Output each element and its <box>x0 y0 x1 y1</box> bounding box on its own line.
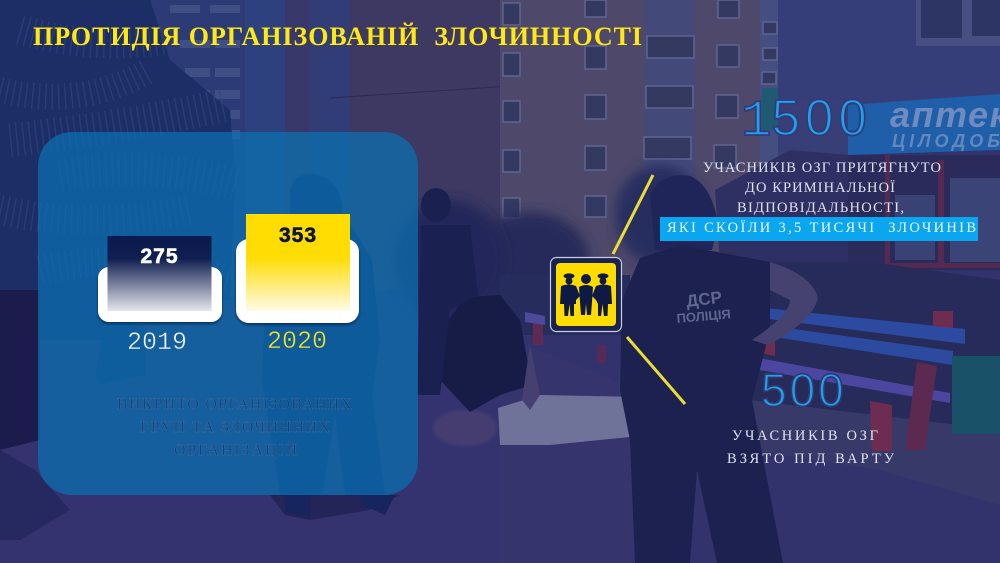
tan apartment block with windows <box>500 0 780 290</box>
benches <box>525 306 1000 451</box>
detainee <box>579 274 593 315</box>
caption: organised groups exposed: ВИКРИТО ОРГАНІЗОВАНИХ <box>117 396 352 413</box>
standing officer centre <box>417 188 478 395</box>
distant tower and walls <box>0 0 660 300</box>
connector line: to upper statistic <box>613 175 653 254</box>
text block: participants prosecuted: ДО КРИМІНАЛЬНОЇ <box>745 179 895 196</box>
bar 2020 <box>246 214 350 311</box>
caption: organised groups exposed <box>117 396 352 459</box>
year 2020: 2020 <box>267 327 327 356</box>
text block: participants taken into custody: ВЗЯТО ПІД ВАРТУ <box>727 451 895 467</box>
officer silhouette behind panel <box>262 174 395 518</box>
icon: police officers escorting a detainee <box>550 258 622 332</box>
white card 2020 <box>236 239 359 323</box>
highlight: crimes committed: ЯКІ СКОЇЛИ 3,5 ТИСЯЧІ ЗЛОЧИНІВ <box>667 219 976 236</box>
bar 2019 <box>108 236 212 311</box>
police officer right: ДСР <box>685 288 723 311</box>
right officer <box>592 273 612 316</box>
statistic: 500: 500 <box>761 364 847 416</box>
bar 2019: 275 <box>140 245 179 268</box>
connector line: to lower statistic <box>627 337 685 404</box>
panel: organised groups exposed <box>38 132 418 518</box>
highlight: crimes committed <box>660 217 978 241</box>
police officer right: ПОЛІЦІЯ <box>676 306 731 326</box>
officer silhouette lower left of panel <box>95 325 145 385</box>
title: ПРОТИДІЯ ОРГАНІЗОВАНІЙ ЗЛОЧИННОСТІ <box>33 22 642 51</box>
caption: organised groups exposed: ГРУП ТА ЗЛОЧИННИХ <box>140 419 330 436</box>
right wall with upper windows <box>778 0 1000 160</box>
detained man on ground <box>433 395 640 446</box>
statistic: 1500: 1500 <box>741 89 872 151</box>
fir tree at left <box>0 0 240 300</box>
police officer right <box>620 175 818 563</box>
white card 2019 <box>98 267 222 322</box>
left officer <box>560 273 580 316</box>
pharmacy shop <box>715 94 1000 270</box>
text block: participants prosecuted: УЧАСНИКІВ ОЗГ ПРИТЯГНУТО <box>703 160 941 176</box>
text block: participants prosecuted: ВІДПОВІДАЛЬНОСТІ, <box>737 200 904 216</box>
text block: participants taken into custody <box>727 428 895 467</box>
text block: participants taken into custody: УЧАСНИКІВ ОЗГ <box>732 428 878 444</box>
crouching officer <box>440 295 540 412</box>
paved ground <box>0 320 1000 563</box>
caption: organised groups exposed: ОРГАНІЗАЦІЙ <box>174 440 297 459</box>
year 2019: 2019 <box>127 328 187 357</box>
text block: participants prosecuted <box>703 160 941 216</box>
bar 2020: 353 <box>279 224 317 247</box>
bushes and small trees <box>0 165 1000 450</box>
